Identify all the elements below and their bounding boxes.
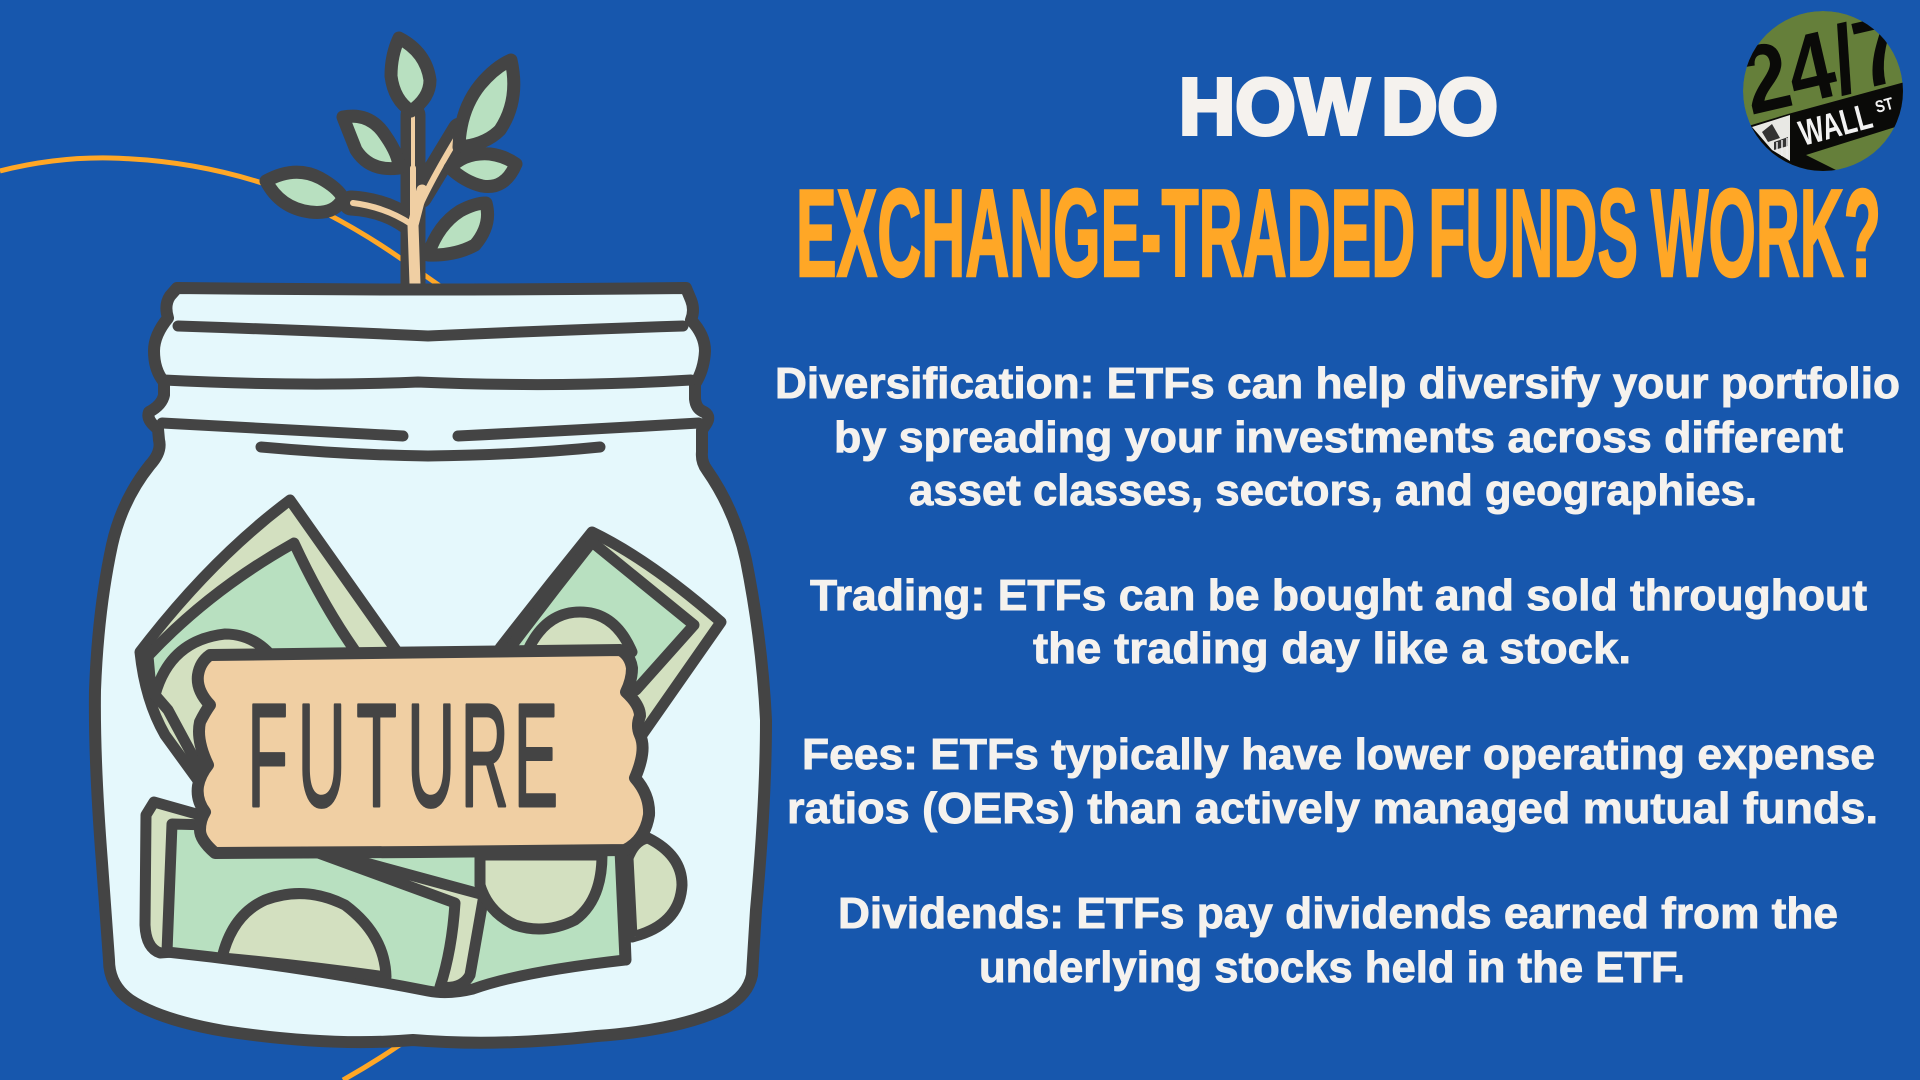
leaves — [266, 38, 516, 255]
text block: trading: Trading: ETFs can be bought and sold throughout — [810, 571, 1867, 620]
plant stem — [353, 131, 461, 284]
logo street sign band — [1745, 82, 1905, 172]
logo building — [1752, 115, 1790, 161]
money: back left bill — [140, 500, 403, 790]
text block: diversification: asset classes, sectors, and geographies. — [909, 466, 1757, 515]
text block: dividends — [838, 889, 1838, 992]
text block: diversification: by spreading your investments across different — [834, 413, 1843, 462]
logo: 24/7 Wall St — [1743, 11, 1903, 171]
jar lid lines — [162, 326, 699, 456]
text block: trading: the trading day like a stock. — [1033, 624, 1631, 673]
text block: dividends: underlying stocks held in the ETF. — [979, 943, 1685, 992]
text block: trading — [810, 571, 1867, 673]
logo disc — [1743, 11, 1903, 171]
text block: fees: Fees: ETFs typically have lower operating expense — [802, 730, 1875, 779]
plant stem outline — [351, 115, 460, 284]
text block: diversification: Diversification: ETFs can help diversify your portfolio — [775, 359, 1900, 408]
text block: diversification — [775, 359, 1900, 515]
future label text: FUTURE — [248, 674, 558, 838]
decorative orange arc — [0, 158, 440, 1080]
text block: fees — [787, 730, 1878, 833]
text block: dividends: Dividends: ETFs pay dividends earned from the — [838, 889, 1838, 938]
future label — [198, 650, 649, 853]
logo wall text: WALL — [1794, 95, 1877, 154]
title line 1: HOW DO — [1179, 62, 1498, 151]
money: lower bills — [145, 802, 682, 993]
logo st text: ST — [1873, 94, 1896, 117]
money: back right bill — [500, 532, 721, 735]
text block: fees: ratios (OERs) than actively managed mutual funds. — [787, 784, 1878, 833]
jar body — [95, 288, 766, 1043]
plant — [266, 38, 516, 284]
illustration: jar of money with plant — [95, 38, 766, 1043]
